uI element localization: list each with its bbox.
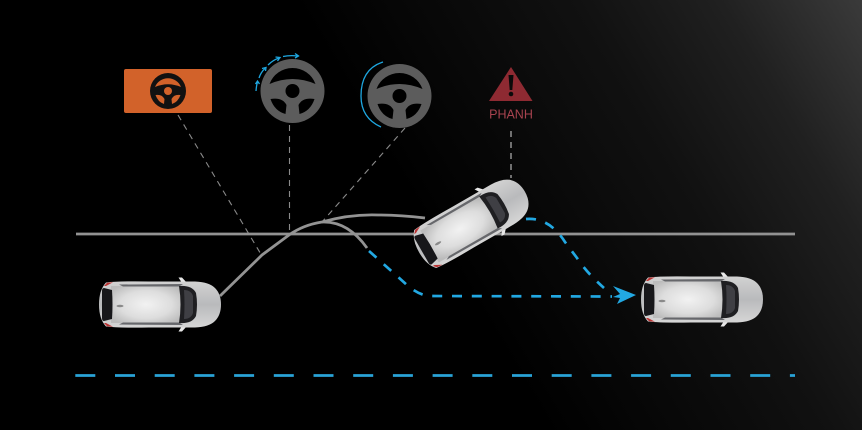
gray vehicle paths bbox=[220, 215, 425, 296]
arc: counter-steer bbox=[361, 62, 383, 127]
callout leader lines bbox=[178, 115, 511, 256]
arrows: steering rotation bbox=[256, 54, 298, 91]
road edge line bbox=[76, 233, 795, 235]
warning icon panel: orange steering indicator bbox=[124, 69, 212, 113]
label: brake: PHANH bbox=[489, 108, 533, 122]
car: starting position bbox=[99, 278, 221, 332]
arrowhead bbox=[613, 286, 636, 304]
car: swerving and braking bbox=[406, 168, 538, 276]
icon: black steering wheel bbox=[150, 73, 186, 109]
icon: brake warning bbox=[489, 67, 533, 122]
icon: steering wheel with counter-steer arc bbox=[361, 62, 432, 128]
car: stabilized position bbox=[641, 272, 763, 326]
blue avoidance path with arrow bbox=[369, 219, 636, 304]
icon: steering wheel with turning arrows bbox=[256, 54, 324, 123]
lane dashed line bbox=[75, 374, 795, 377]
